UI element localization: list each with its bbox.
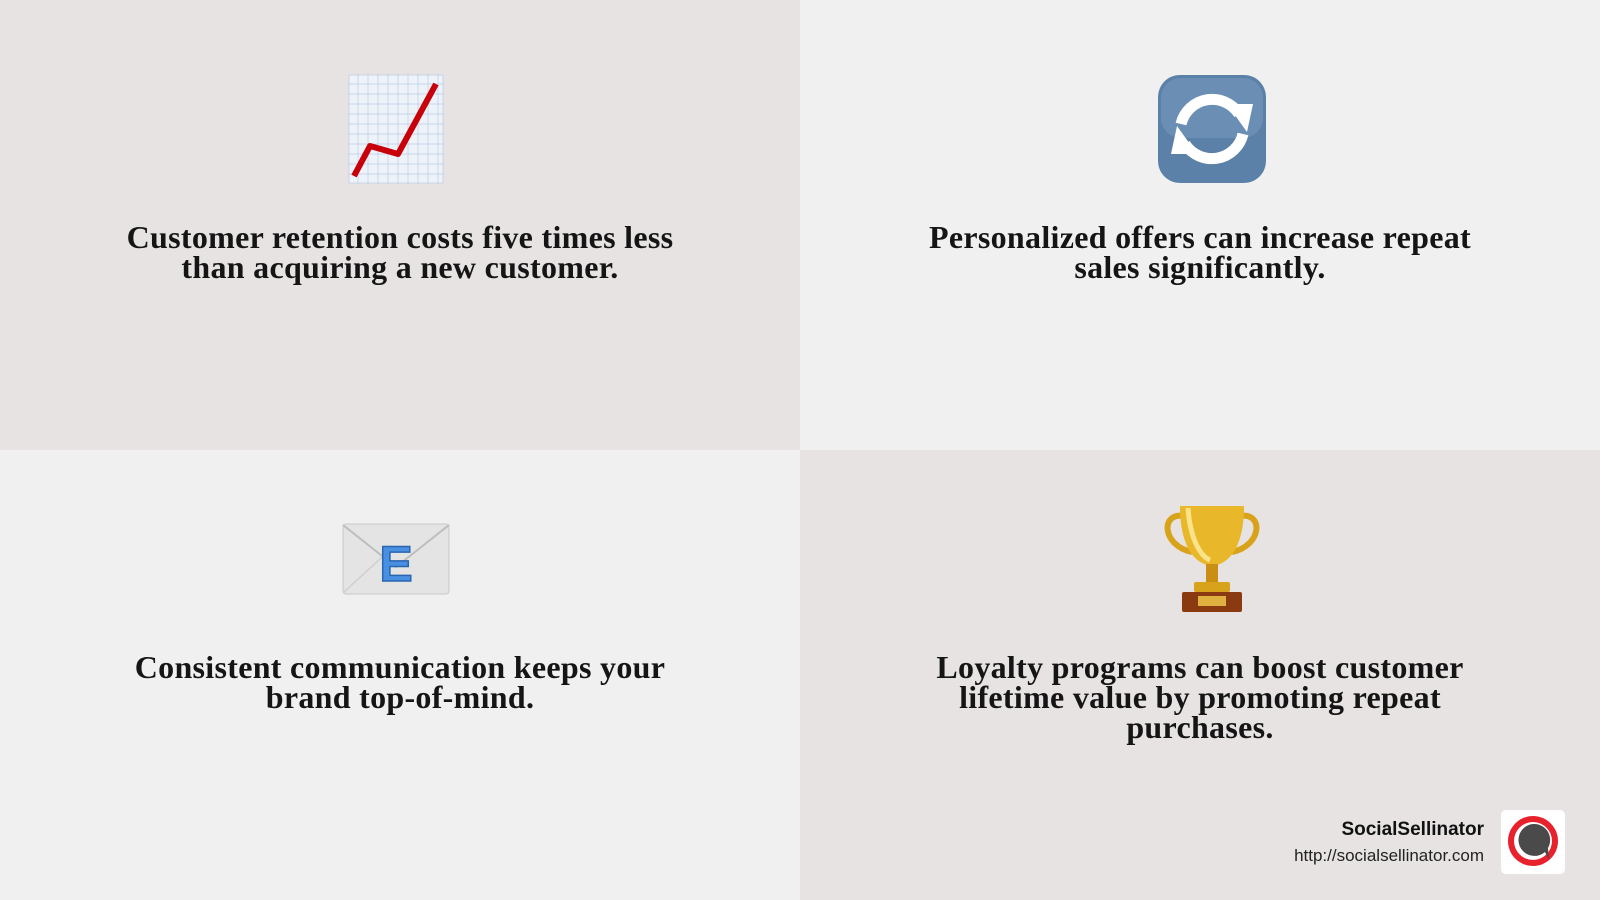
text: communication — [135, 649, 665, 715]
icon: trophy — [1164, 506, 1260, 612]
text: loyalty: lifetime value by promoting repeat — [959, 679, 1441, 715]
text: communication: brand top-of-mind. — [266, 679, 534, 715]
text: communication: Consistent communication keeps your — [135, 649, 665, 685]
icon: e-mail envelope: E — [379, 536, 413, 592]
text: loyalty: Loyalty programs can boost customer — [936, 649, 1464, 685]
text: personalized: Personalized offers can increase repeat — [929, 219, 1471, 255]
text: retention: than acquiring a new customer. — [181, 249, 619, 285]
text: loyalty: purchases. — [1126, 709, 1274, 745]
text: retention: Customer retention costs five times less — [127, 219, 673, 255]
panel: loyalty programs — [800, 450, 1600, 900]
text: personalized — [929, 219, 1471, 285]
text: retention — [127, 219, 673, 285]
logo — [1501, 810, 1565, 874]
icon: chart increasing — [348, 74, 444, 184]
panel: retention cost — [0, 0, 800, 450]
brand url: http://socialsellinator.com — [1294, 846, 1484, 865]
brand name: SocialSellinator — [1341, 819, 1484, 840]
panel: personalized offers — [800, 0, 1600, 450]
panel: communication — [0, 450, 800, 900]
icon: e-mail envelope — [342, 524, 450, 594]
brand block — [1294, 810, 1565, 874]
icon: repeat arrows — [1158, 75, 1266, 183]
text: personalized: sales significantly. — [1074, 249, 1326, 285]
text: loyalty — [936, 649, 1464, 745]
